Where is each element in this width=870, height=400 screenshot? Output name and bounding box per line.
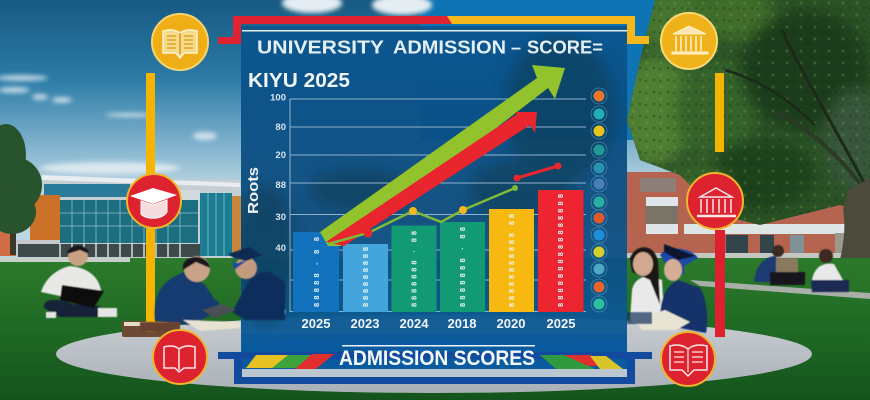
chart: admission scores bar chart [245,65,586,331]
title: SCORE= [527,38,603,58]
student: centre-left pair reading [140,247,285,332]
y axis title: Roots [245,167,262,214]
bar value text: 8888888888888888 [556,194,565,307]
building: right brick hall [627,172,870,258]
icon: yellow institution top-right [661,13,717,69]
icon: open book top-left [152,14,208,70]
icon: red open book bottom-left [153,330,207,384]
bar value text: 8888888 · 88 [410,231,418,307]
year labels: 2025 [302,316,330,331]
y axis labels: 20 [275,150,286,161]
footer: admission scores banner [218,334,652,384]
banner heading: ADMISSION SCORES [339,347,535,370]
title: ADMISSION [393,38,506,58]
tree: left [0,124,42,255]
bars [293,190,584,312]
books: stack on plaza [122,321,170,337]
bar value text: 88888 - 8 8 [312,237,321,307]
foliage: large right tree [617,0,870,268]
bar value text [312,194,565,307]
icon: red institution [687,173,743,229]
red growth arrow [326,112,537,246]
year labels [302,316,575,331]
banner colour chips right [540,355,623,369]
top clouds [282,0,432,15]
year labels: 2024 [400,316,429,331]
y axis labels [270,92,286,318]
y axis labels: 0 [281,307,286,318]
red vertical connector right bottom [715,230,725,337]
title: – [511,38,521,58]
frame: red top-left bracket [218,16,454,44]
yellow vertical connector right top [715,73,724,152]
bar value text: 888888888 [361,247,370,307]
bar value text: 8888888 · 88 [458,227,467,307]
building: left glass hall [0,175,241,258]
green trend line [328,188,515,244]
student: centre-right pair reading [627,244,707,333]
icon: red open book bottom-right [661,332,715,386]
year labels: 2025 [547,316,575,331]
y axis labels: 80 [275,122,286,133]
y axis labels: 100 [270,92,286,104]
panel top rule [242,30,627,32]
icon: graduation cap [127,174,181,228]
y axis labels: 30 [275,212,286,223]
banner colour chips left [246,354,334,369]
footer frame [218,352,652,384]
green growth arrow [320,65,565,246]
plaza: circular paved area [56,315,812,393]
yellow vertical connector left [146,73,155,332]
panel: translucent chart panel [235,26,627,375]
year labels: 2018 [448,316,476,331]
title: UNIVERSITY [257,38,384,58]
bar value text: 88888888888 88 [507,214,516,307]
subtitle: KIYU 2025 [248,69,350,92]
y axis labels: 40 [275,243,286,254]
y axis labels: 88 [275,180,286,191]
banner top rule [342,345,535,346]
students: right lawn group [754,245,849,292]
student: reading on the left lawn [41,246,117,318]
year labels: 2020 [497,316,525,331]
tree trunk and branches [725,30,870,268]
trend markers [364,162,562,238]
legend dots [591,88,607,312]
year labels: 2023 [351,316,379,331]
frame: yellow top-right bracket [447,16,649,44]
